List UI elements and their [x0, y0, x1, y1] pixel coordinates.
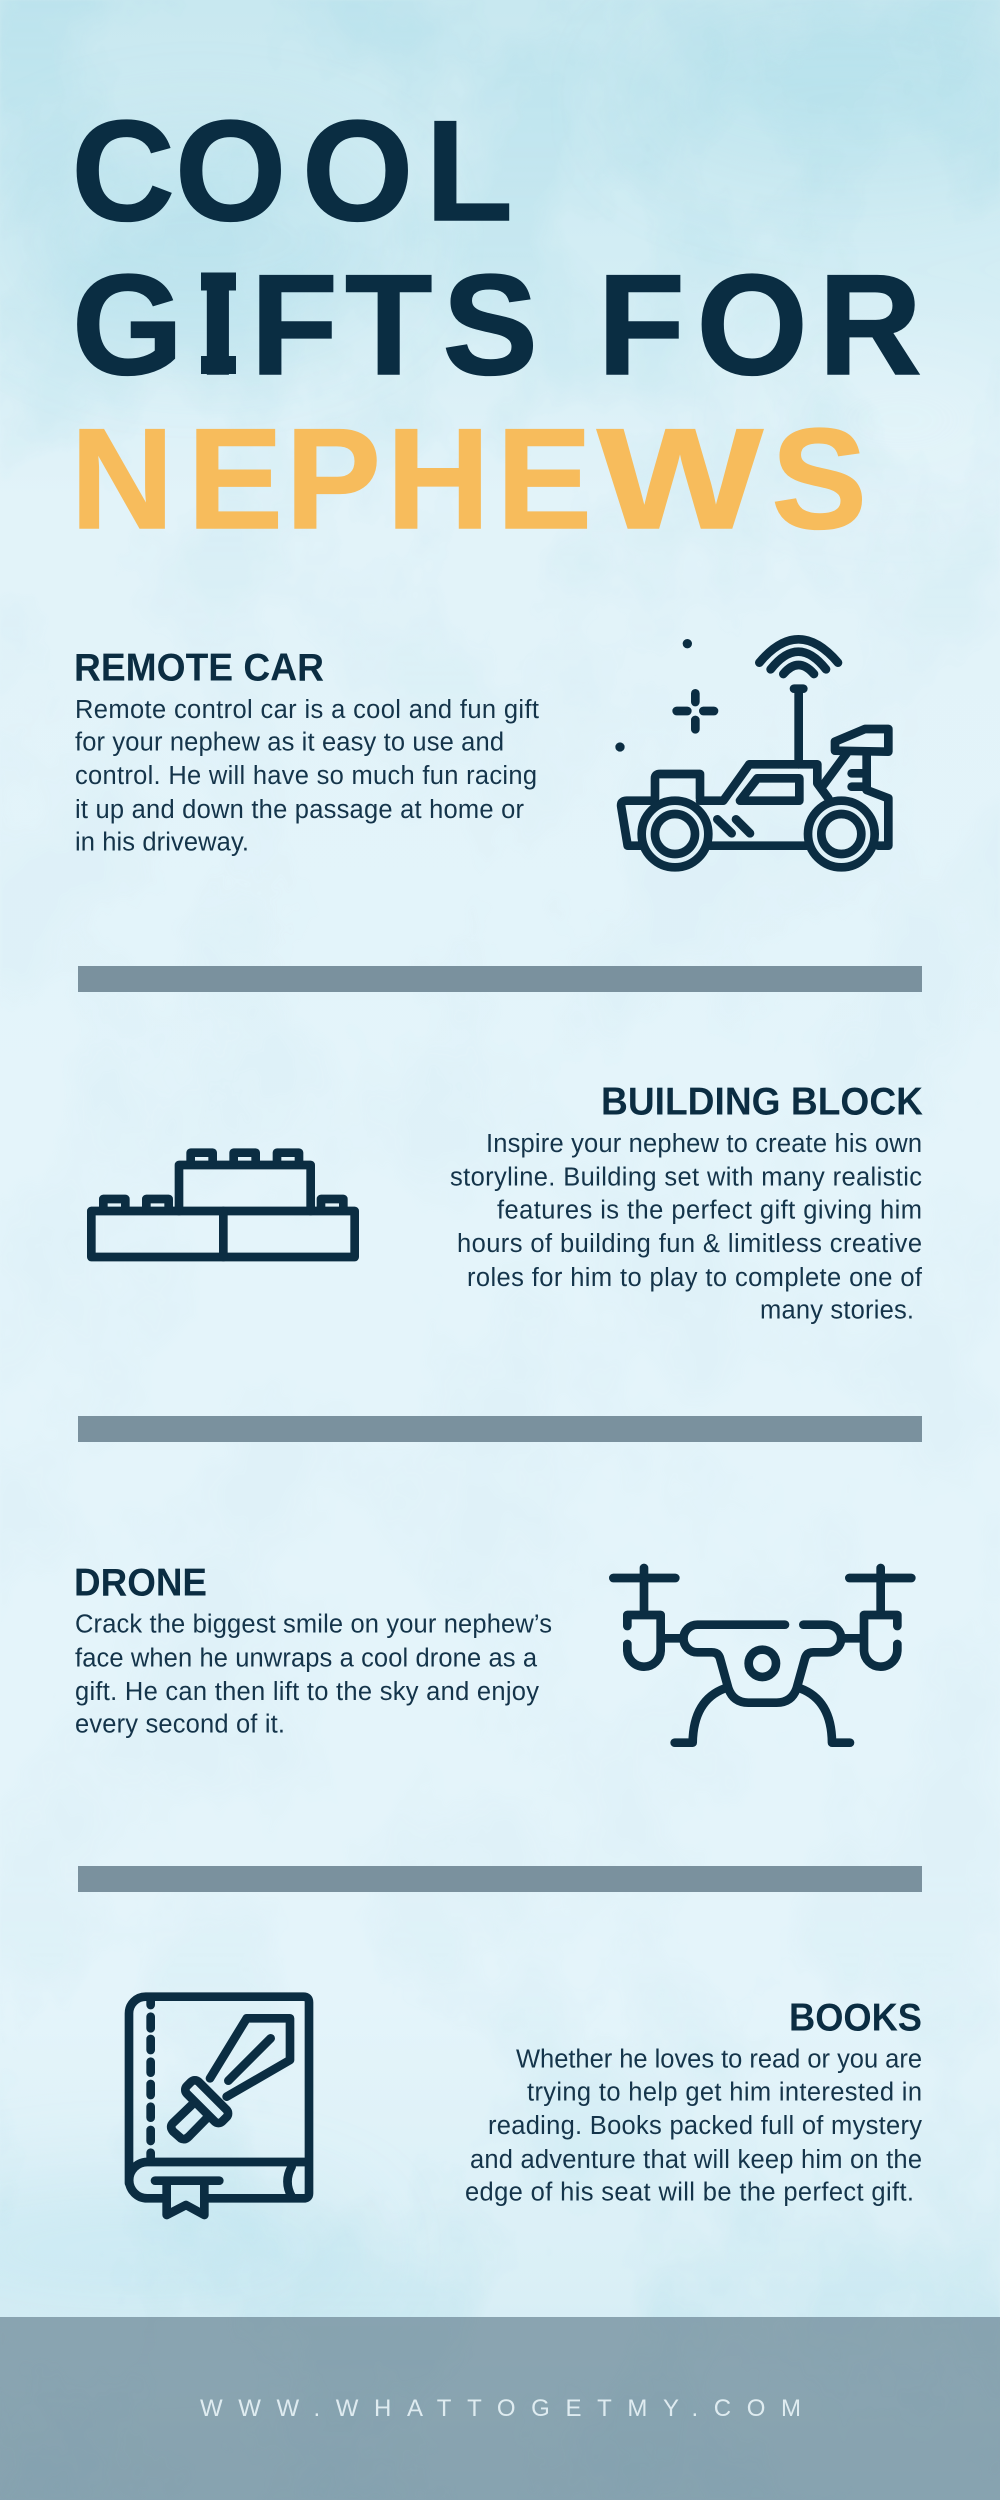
- text block: drone description: every second of it.: [75, 1711, 285, 1739]
- text block: drone description: gift. He can then lift to the sky and enjoy: [75, 1678, 539, 1706]
- text block: remote car description: for your nephew as it easy to use and: [75, 729, 504, 757]
- text block: drone description: Crack the biggest smile on your nephew’s: [75, 1611, 552, 1639]
- title line: NEPHEWS: NEPHE: [70, 400, 592, 559]
- panel: remote car: [74, 639, 888, 867]
- text block: building block description: roles for him to play to complete one of: [467, 1264, 923, 1292]
- title line: NEPHEWS: W: [597, 400, 763, 559]
- text block: building block description: many stories.: [760, 1297, 914, 1325]
- title line: NEPHEWS: S: [772, 400, 867, 559]
- heading: books: BOOKS: [789, 1997, 922, 2040]
- text block: building block description: hours of building fun & limitless creative: [457, 1230, 922, 1258]
- panel: building block: [91, 1081, 923, 1325]
- title line: GIFTS FOR: GIFTS FOR: [72, 246, 922, 405]
- footer band: [0, 2317, 1000, 2500]
- text block: books description: [465, 2045, 922, 2207]
- text block: books description: trying to help get him interested in: [527, 2079, 922, 2107]
- divider 2: [78, 1416, 922, 1442]
- icon: book with sword: [129, 1997, 309, 2215]
- title: [70, 92, 922, 559]
- text block: books description: reading. Books packed full of mystery: [488, 2112, 922, 2140]
- text block: remote car description: in his driveway.: [75, 829, 249, 857]
- text block: books description: Whether he loves to read or you are: [516, 2045, 922, 2073]
- text block: drone description: [75, 1611, 552, 1739]
- icon: building blocks: [91, 1153, 355, 1257]
- text block: remote car description: [75, 696, 539, 857]
- text block: books description: and adventure that will keep him on the: [470, 2146, 922, 2174]
- text block: building block description: features is the perfect gift giving him: [497, 1197, 922, 1225]
- divider 1: [78, 966, 922, 992]
- text block: building block description: [450, 1130, 923, 1325]
- divider 3: [78, 1866, 922, 1892]
- text block: building block description: Inspire your nephew to create his own: [486, 1130, 922, 1158]
- heading: drone: DRONE: [74, 1561, 207, 1604]
- title line: COOL: COOL: [72, 92, 513, 251]
- text block: drone description: face when he unwraps a cool drone as a: [75, 1645, 538, 1673]
- panel: books: [129, 1997, 922, 2215]
- text block: building block description: storyline. Building set with many realistic: [450, 1163, 922, 1191]
- footer url: WWW.WHATTOGETMY.COM: [200, 2395, 801, 2422]
- icon: remote control car: [615, 639, 888, 867]
- text block: books description: edge of his seat will be the perfect gift.: [465, 2179, 914, 2207]
- text block: remote car description: control. He will have so much fun racing: [75, 762, 537, 790]
- panel: drone: [74, 1561, 911, 1743]
- text block: remote car description: Remote control car is a cool and fun gift: [75, 696, 539, 724]
- heading: remote car: REMOTE CAR: [74, 647, 324, 690]
- icon: drone: [613, 1568, 911, 1743]
- heading: building block: BUILDING BLOCK: [601, 1081, 923, 1124]
- text block: remote car description: it up and down the passage at home or: [75, 796, 524, 824]
